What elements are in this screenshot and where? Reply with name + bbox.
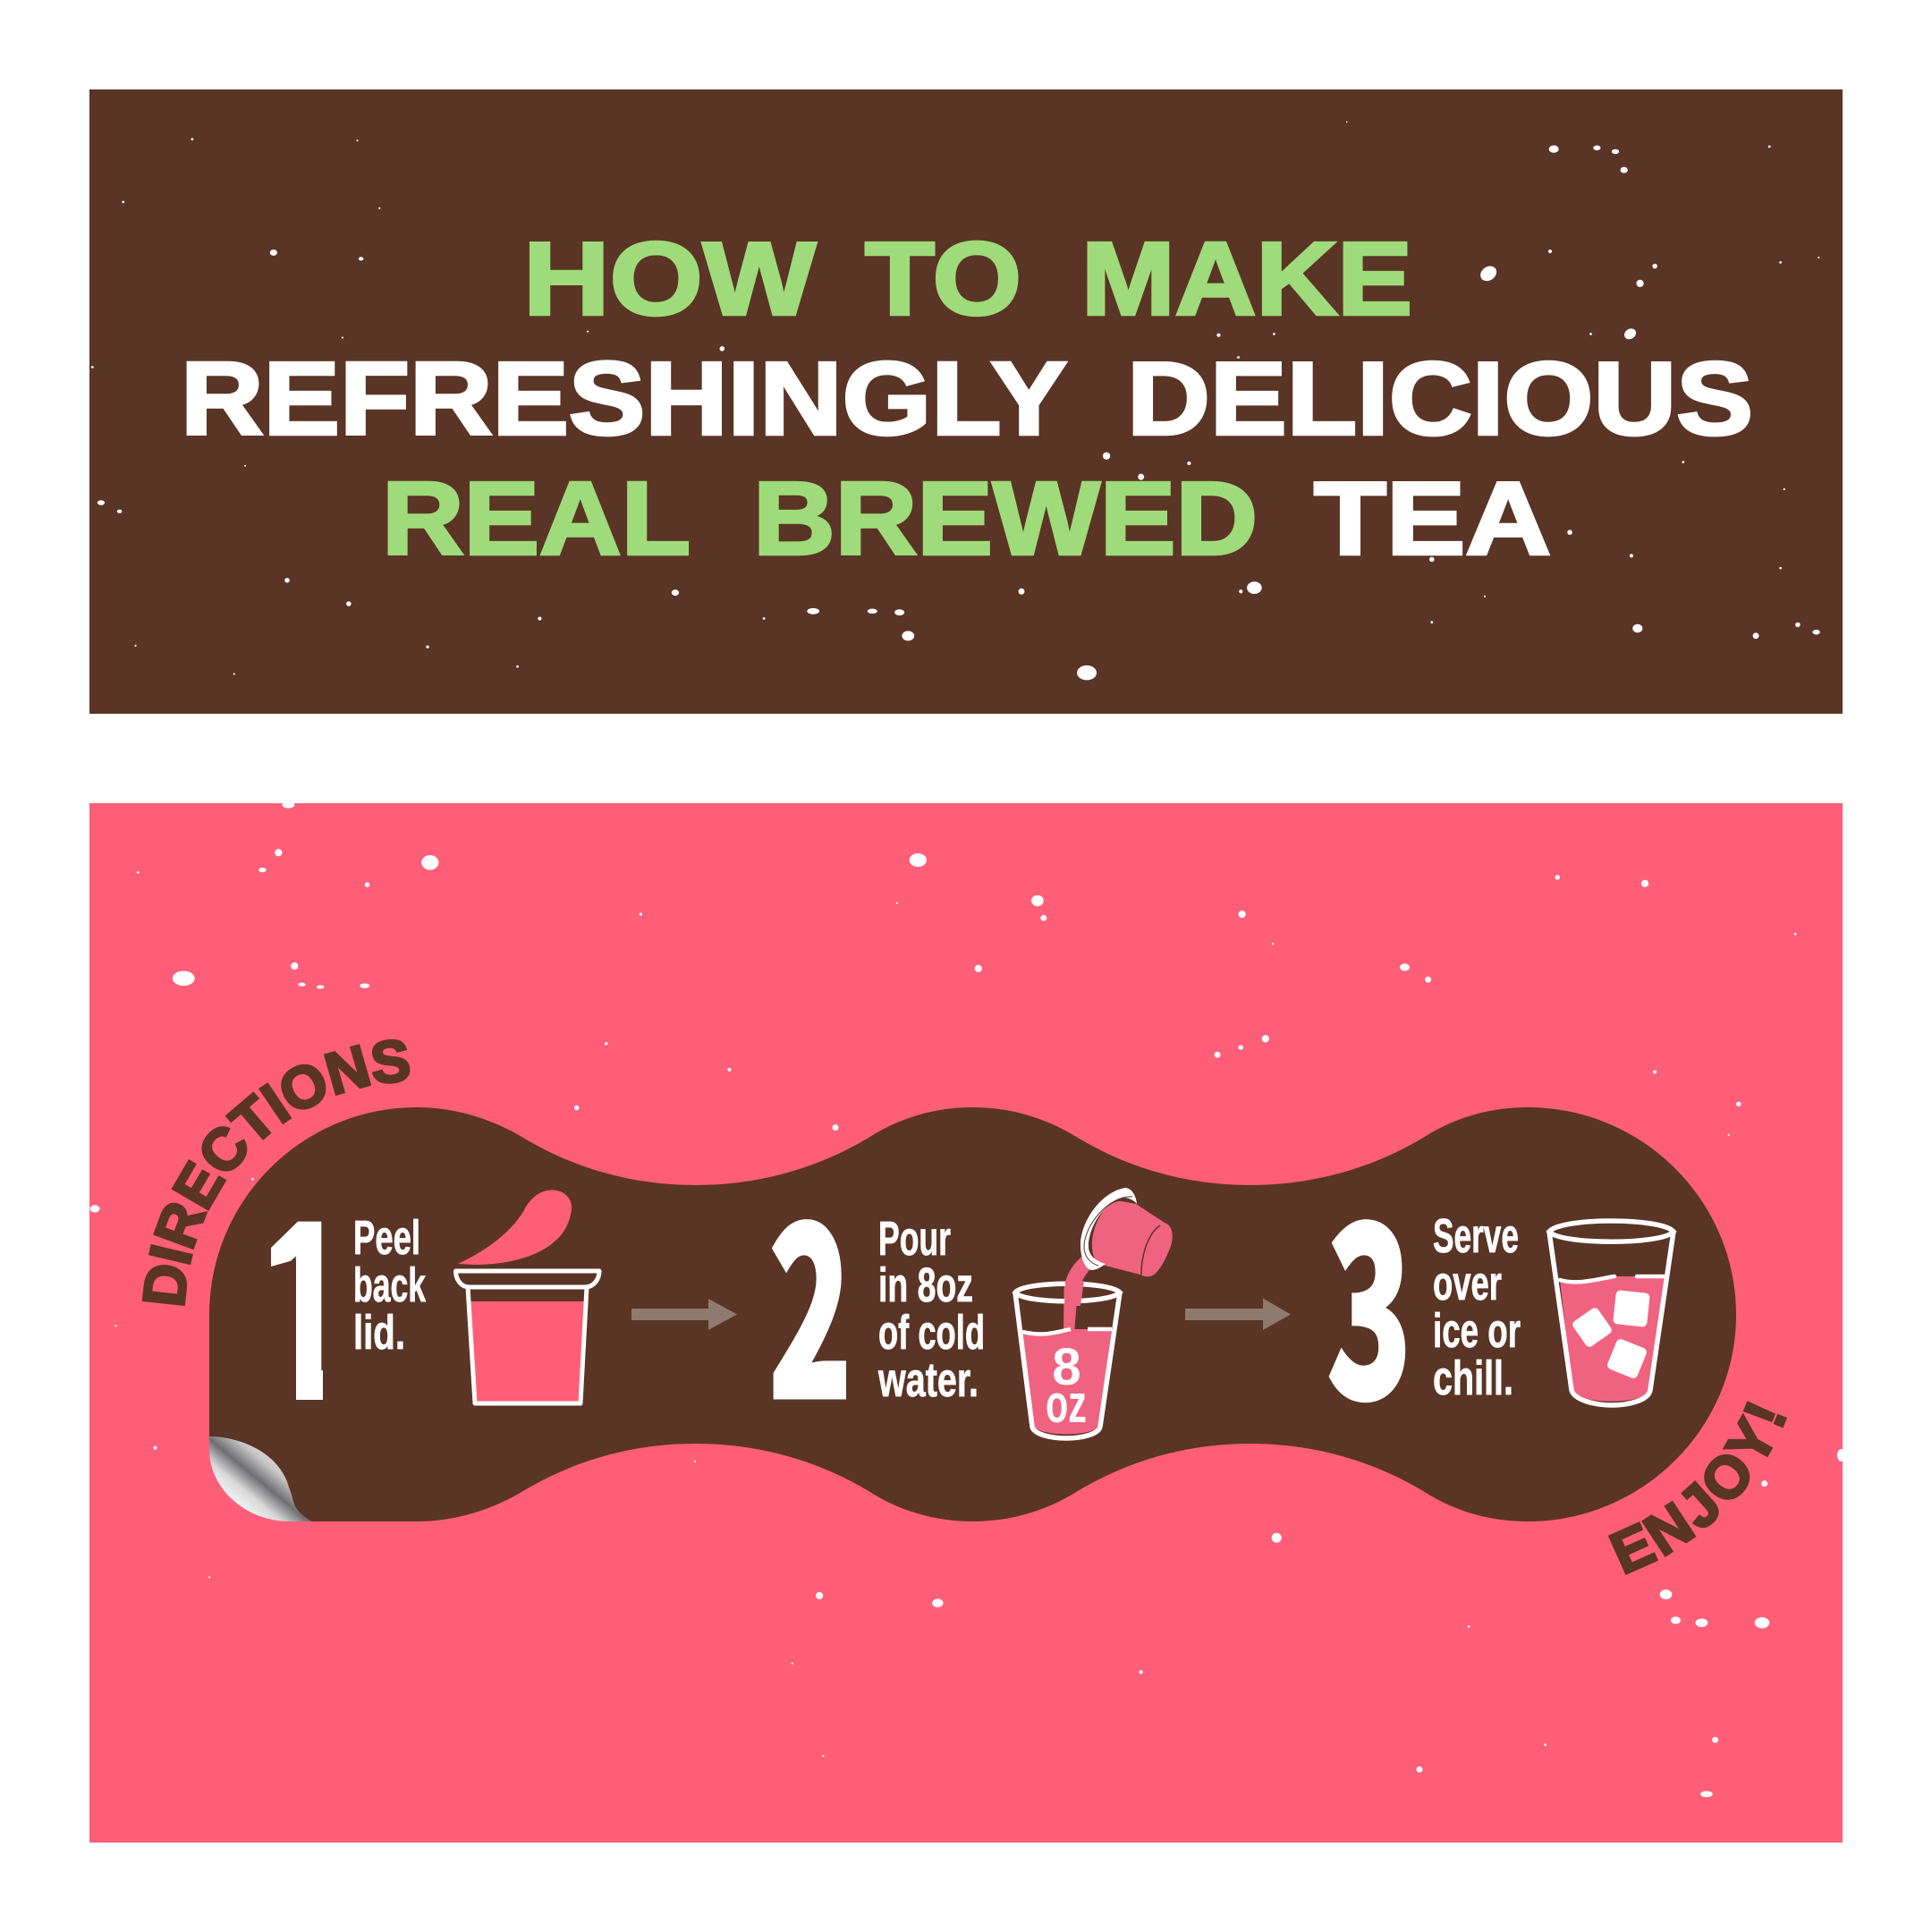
number 2: 2 [768, 1121, 852, 1468]
step 2 text: water. [877, 1353, 979, 1407]
step 3 text [1433, 1209, 1521, 1405]
step 3 text: ice or [1433, 1304, 1521, 1358]
title line 1 [523, 220, 1412, 336]
step 2 text: in 8oz [878, 1258, 973, 1312]
pod [1080, 1188, 1173, 1276]
8 oz label: oz [1046, 1374, 1087, 1434]
title line 2 [181, 340, 1753, 456]
label: directions: DIRECTIONS [141, 1039, 410, 1306]
title line 3: BREWED [753, 460, 1258, 576]
number 3: 3 [1326, 1121, 1412, 1468]
title line 3: REAL [382, 460, 691, 576]
step 2 text: of cold [878, 1306, 985, 1360]
brown blob panel [209, 1107, 1736, 1521]
step 1 text: lid. [353, 1306, 405, 1360]
icon: tea cup with lid peeling [456, 1190, 599, 1403]
peeled corner sticker [209, 1436, 311, 1521]
step 3 text: chill. [1433, 1352, 1513, 1405]
step 1 text: back [353, 1258, 427, 1312]
8 oz label [1046, 1338, 1087, 1434]
title line 1: HOW [523, 220, 817, 336]
step 3 text: Serve [1433, 1209, 1519, 1263]
title: how to make refreshingly delicious real brewed tea [181, 220, 1753, 576]
step 2 [768, 1121, 1173, 1468]
title line 1: MAKE [1081, 220, 1412, 336]
arrow: step 1 to 2 [631, 1299, 737, 1330]
title line 3: TEA [1314, 460, 1551, 576]
step 1 text [353, 1211, 427, 1360]
title line 3 [382, 460, 1551, 576]
step 2 text: Pour [878, 1212, 951, 1266]
title line 2: REFRESHINGLY [181, 340, 1067, 456]
step 3 text: over [1433, 1257, 1502, 1310]
title line 1: TO [865, 220, 1021, 336]
number 1: 1 [258, 1169, 352, 1453]
title line 2: DELICIOUS [1127, 340, 1753, 456]
icon: glass with ice [1549, 1221, 1674, 1405]
step 1 text: Peel [353, 1211, 420, 1265]
speckles: directions panel [90, 801, 1844, 1797]
step 2 text [877, 1212, 985, 1407]
arrow: step 2 to 3 [1185, 1299, 1291, 1330]
ice cubes [1571, 1290, 1650, 1379]
step 3 [1326, 1121, 1674, 1468]
label: enjoy: ENJOY! [1608, 1401, 1787, 1575]
speckles: title banner [91, 122, 1820, 680]
panel: title banner [89, 89, 1843, 714]
8 oz label: 8 [1052, 1338, 1081, 1396]
panel: directions [89, 803, 1843, 1843]
icon: glass being filled from pod [1015, 1188, 1173, 1438]
step 1 [271, 1190, 601, 1406]
